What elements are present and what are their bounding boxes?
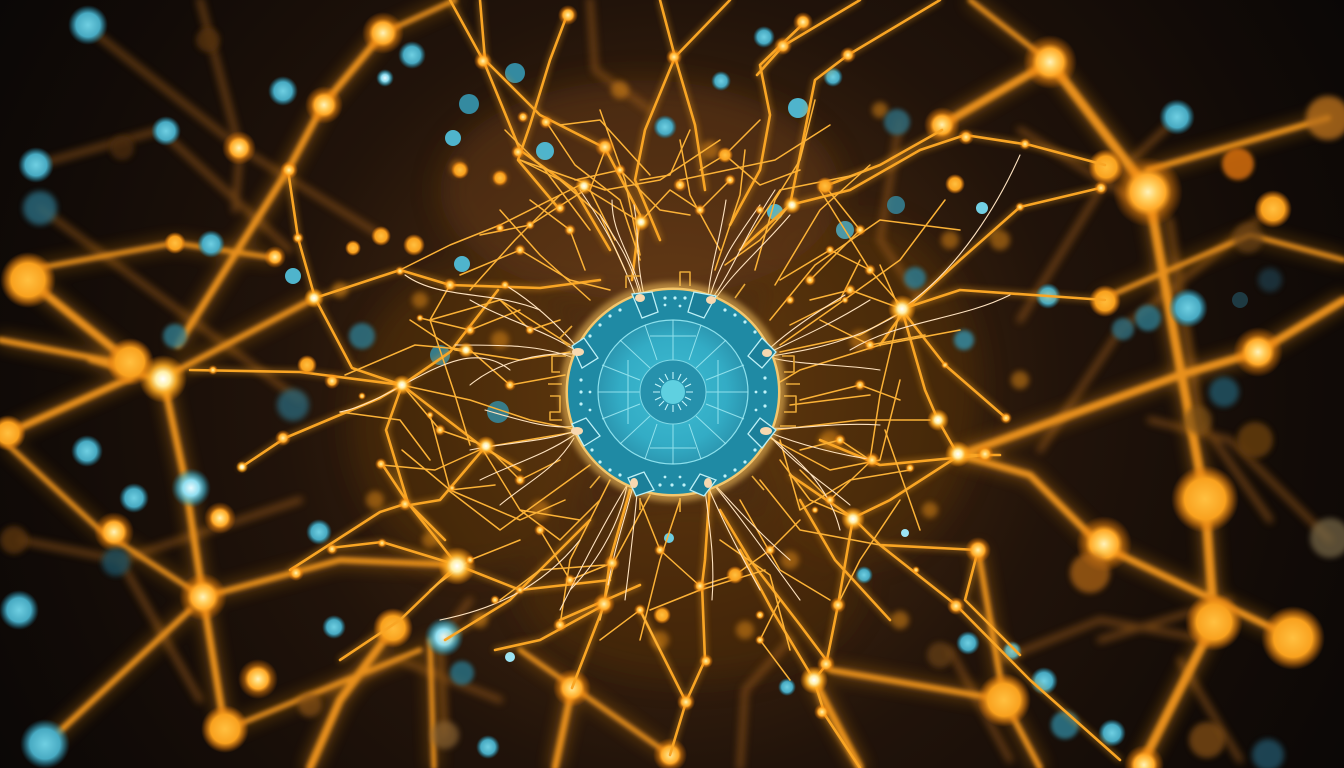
connector pads bbox=[572, 292, 776, 496]
outer ring dots bbox=[579, 296, 767, 487]
fine golden network near the core bbox=[340, 100, 960, 680]
hub rays bbox=[653, 372, 693, 412]
tentacle fibres leaving the core bbox=[340, 155, 1020, 620]
middle ring bbox=[598, 320, 748, 464]
glow under sharp filaments bbox=[190, 0, 1120, 768]
core: teal circuit disc bbox=[560, 282, 786, 502]
core: circuit traces around the disc bbox=[548, 272, 800, 512]
inner hub bbox=[640, 360, 706, 424]
disc base bbox=[566, 288, 780, 496]
radial spokes bbox=[598, 320, 748, 464]
connector highlights bbox=[571, 294, 772, 488]
warm haze patches bbox=[350, 80, 980, 680]
disc glow bbox=[560, 282, 786, 502]
bokeh: amber haze dots around the core bbox=[332, 81, 1029, 649]
small sharp orange nodes bbox=[139, 5, 1108, 720]
sharp orange filaments bbox=[190, 0, 1120, 768]
